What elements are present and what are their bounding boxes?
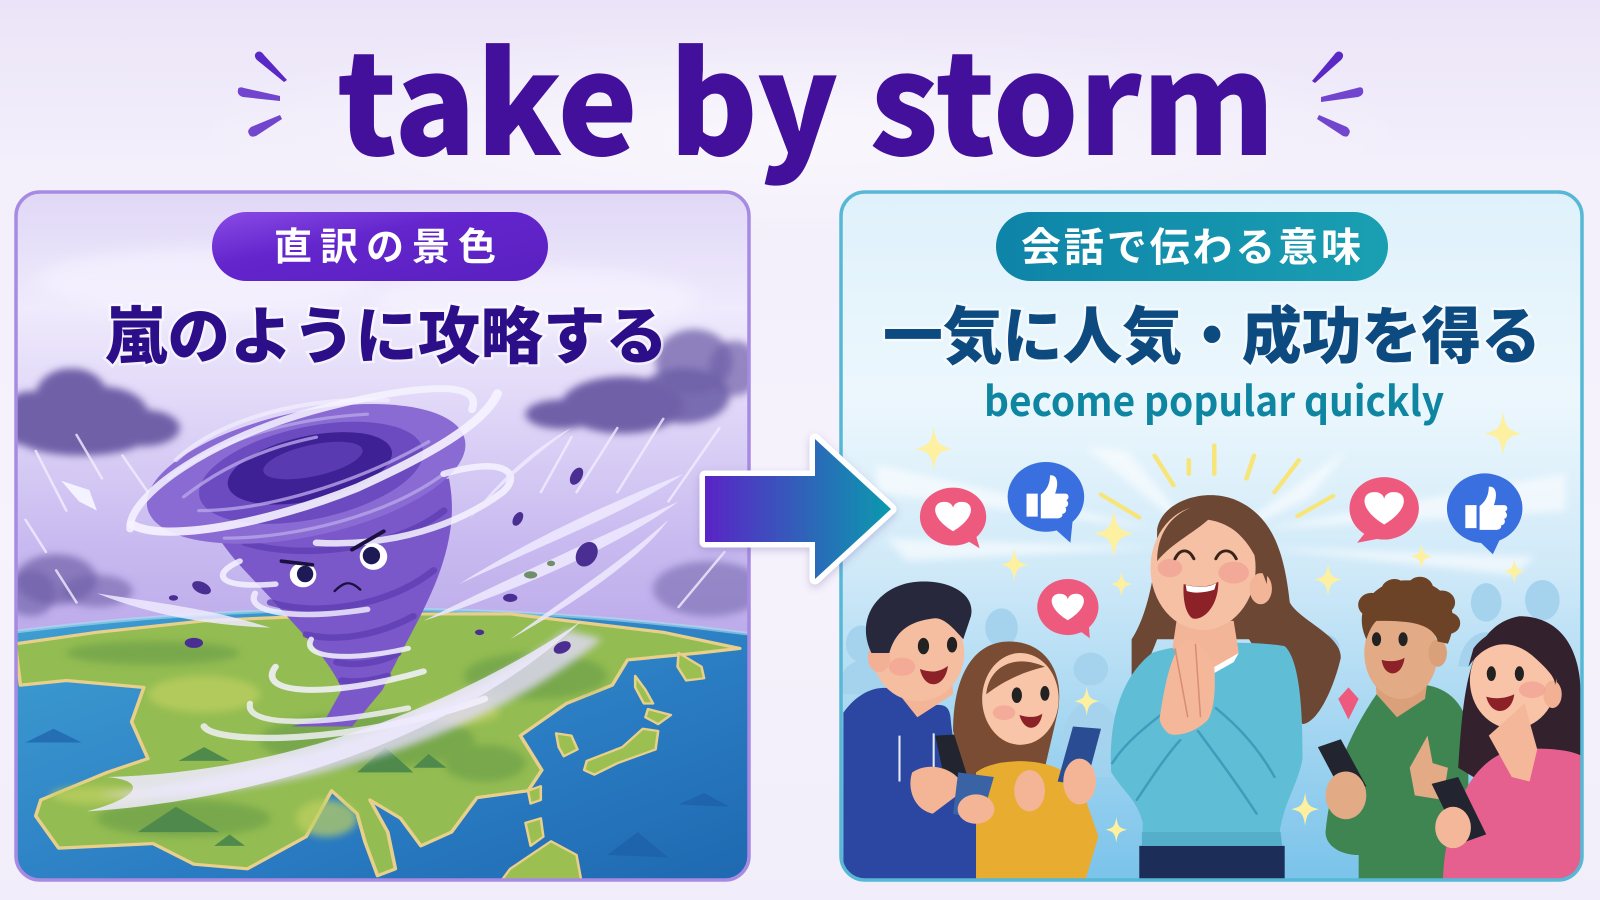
waves <box>26 729 730 857</box>
icon: thumbs-up bubble left <box>1008 462 1084 543</box>
icon: small star <box>61 481 97 511</box>
land shading <box>66 641 607 837</box>
illustration: popular person with crowd <box>831 189 1596 887</box>
earth ocean <box>10 609 755 887</box>
debris <box>169 466 602 656</box>
icon: right title sparks <box>1312 52 1363 137</box>
title: take by storm: take by storm <box>337 0 1275 196</box>
islands <box>500 653 704 883</box>
label pill: conversational <box>996 212 1388 281</box>
clouds <box>0 329 765 616</box>
icon: heart bubble centre <box>1037 579 1098 638</box>
arrow: literal to figurative <box>705 439 891 579</box>
light rays <box>877 446 1565 575</box>
label pill: literal <box>212 212 548 281</box>
icon: heart bubble right <box>1349 477 1419 543</box>
label pill: conversational: 会話で伝わる意味 <box>1021 226 1361 270</box>
panel: literal scene <box>0 189 765 887</box>
rain streaks <box>26 419 745 607</box>
panel border <box>16 192 749 880</box>
right boy <box>1318 577 1468 887</box>
wind sweeps <box>87 428 684 811</box>
left girl <box>953 641 1101 887</box>
tornado face <box>282 531 387 591</box>
sparkles <box>915 411 1525 843</box>
heading: literal meaning: 嵐のように攻略する <box>105 303 668 372</box>
panel border <box>841 192 1582 880</box>
background crowd <box>836 580 1573 777</box>
left boy <box>843 582 976 878</box>
icon: heart bubble left <box>920 488 986 548</box>
panel: conversational meaning <box>831 189 1596 887</box>
central sparkle rays <box>1101 445 1333 518</box>
heading: figurative meaning: 一気に人気・成功を得る <box>883 303 1541 372</box>
lavender wind wash <box>97 630 602 796</box>
icon: left title sparks <box>238 52 287 137</box>
English subheading: become popular quickly <box>984 368 1444 428</box>
soft upper clouds <box>52 251 655 294</box>
white swirls <box>130 389 511 738</box>
label pill: literal: 直訳の景色 <box>274 227 496 269</box>
right girl <box>1432 616 1586 887</box>
tornado bowl <box>146 404 466 544</box>
glow on horizon <box>10 609 755 635</box>
illustration: tornado over the earth <box>0 189 765 887</box>
centre woman <box>1111 495 1341 887</box>
mountains <box>138 747 446 846</box>
bowl streak texture <box>168 414 444 538</box>
land: main continent <box>15 614 740 876</box>
icon: thumbs-up bubble right <box>1447 473 1522 554</box>
tornado funnel <box>204 478 452 726</box>
